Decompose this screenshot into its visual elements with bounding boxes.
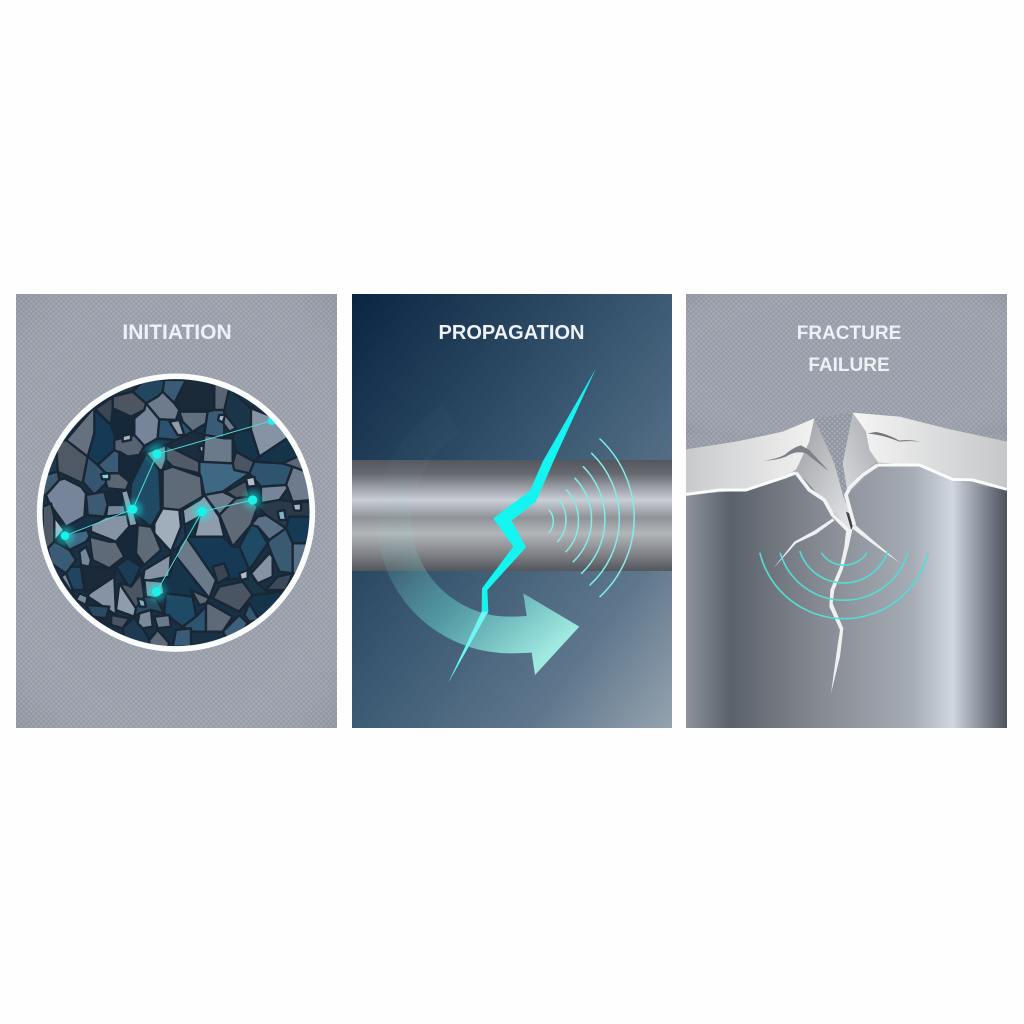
shock wave arcs: [760, 552, 928, 619]
exposed textured gap: [814, 413, 853, 515]
pipe: [352, 460, 672, 571]
panel: propagation: [352, 294, 672, 728]
plate edge highlight: [686, 465, 1007, 494]
heading: fracture failure: [797, 323, 901, 376]
heading: propagation: PROPAGATION: [439, 322, 584, 344]
heading: initiation: INITIATION: [122, 321, 232, 344]
heading: fracture failure: FRACTURE: [797, 323, 901, 344]
fracture flaps: [796, 418, 851, 532]
cylinder body: [686, 465, 1007, 728]
left plate: [686, 418, 814, 494]
heading: fracture failure: FAILURE: [808, 355, 890, 376]
panel: fracture failure: [686, 294, 1007, 728]
crack bolt: [448, 368, 596, 683]
crack tail highlight: [448, 612, 488, 683]
microstructure circle: [36, 376, 312, 650]
crack network: [65, 421, 272, 592]
curved arrow: [377, 405, 579, 675]
panel: initiation: [16, 294, 337, 728]
hairline cracks: [763, 432, 921, 472]
cracks: [773, 465, 899, 693]
right plate: [853, 413, 1007, 487]
crack nodes: [56, 416, 276, 601]
wave arcs: [549, 439, 634, 597]
